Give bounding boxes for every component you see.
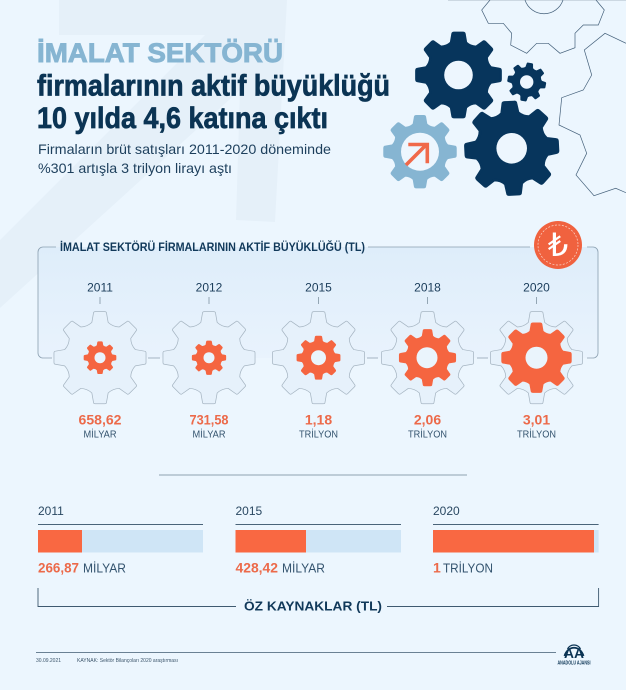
gear: 2012: MİLYAR xyxy=(192,428,226,441)
subtitle: %301 artışla 3 trilyon lirayı aştı xyxy=(38,160,232,176)
icon: lira badge xyxy=(534,221,582,269)
gear: 2020: 3,01 xyxy=(523,412,550,428)
bar: 2015: 2015 xyxy=(236,504,263,518)
bar: 2011: 266,87 xyxy=(38,560,79,576)
gear: 2015: 2015 xyxy=(305,280,332,294)
icon: large navy gear xyxy=(416,33,501,117)
title: 10 yılda 4,6 katına çıktı xyxy=(37,102,328,135)
panel heading: İMALAT SEKTÖRÜ FİRMALARININ AKTİF BÜYÜKLÜĞÜ (TL) xyxy=(60,241,365,254)
bar: 2011: MİLYAR xyxy=(83,561,126,576)
gear: 2018: 2018 xyxy=(414,280,441,294)
gear: 2020 xyxy=(490,280,583,441)
bar: 2015 xyxy=(236,504,401,576)
bar: 2020: 1 xyxy=(433,560,441,576)
gear: 2011 xyxy=(54,280,146,441)
icon: Anadolu Ajansı logo: AA xyxy=(564,645,584,661)
icon: Anadolu Ajansı logo xyxy=(558,645,591,666)
gear: 2012 xyxy=(163,280,255,441)
bar: 2015: 428,42 xyxy=(236,560,278,576)
gear: 2018: 2,06 xyxy=(414,412,441,428)
gear: 2020: TRİLYON xyxy=(517,428,556,441)
icon: lira badge: ₺ xyxy=(548,226,568,264)
bar: 2020: TRİLYON xyxy=(443,561,493,576)
title xyxy=(37,38,390,135)
gear: 2012: 2012 xyxy=(196,280,223,294)
footer: 30.09.2021 xyxy=(36,658,61,664)
bar: 2020: 2020 xyxy=(433,504,460,518)
panel: active size bracket xyxy=(38,247,598,358)
icon: small navy gear xyxy=(505,60,548,104)
equity bracket heading xyxy=(38,588,599,614)
bar: 2011 xyxy=(38,504,203,576)
icon: blue gear with arrow xyxy=(384,116,456,187)
icon: lower navy gear xyxy=(463,100,560,197)
bar: 2015: MİLYAR xyxy=(282,561,325,576)
gear: 2015 xyxy=(272,280,365,441)
equity bracket heading: ÖZ KAYNAKLAR (TL) xyxy=(244,599,382,614)
gear: 2018: TRİLYON xyxy=(408,428,447,441)
bar: 2011: 2011 xyxy=(38,504,64,518)
gear: 2012: 731,58 xyxy=(190,412,229,428)
gear: 2011: 2011 xyxy=(87,280,113,294)
title: İMALAT SEKTÖRÜ xyxy=(37,38,283,68)
gear: 2015: 1,18 xyxy=(305,412,332,428)
title: firmalarının aktif büyüklüğü xyxy=(37,70,390,102)
bar: 2020 xyxy=(433,504,599,576)
gear: 2018 xyxy=(381,280,474,441)
icon: background gear outlines xyxy=(482,0,626,196)
subtitle: Firmaların brüt satışları 2011-2020 döneminde xyxy=(38,141,331,157)
gear: 2011: 658,62 xyxy=(78,412,122,428)
gear: 2020: 2020 xyxy=(523,280,550,294)
subtitle xyxy=(38,141,331,176)
footer: KAYNAK: Sektör Bilançoları 2020 araştırması xyxy=(77,658,178,664)
footer xyxy=(36,652,556,664)
gear: 2011: MİLYAR xyxy=(84,428,117,441)
icon: Anadolu Ajansı logo: ANADOLU AJANSI xyxy=(558,660,591,666)
gear: 2015: TRİLYON xyxy=(299,428,338,441)
